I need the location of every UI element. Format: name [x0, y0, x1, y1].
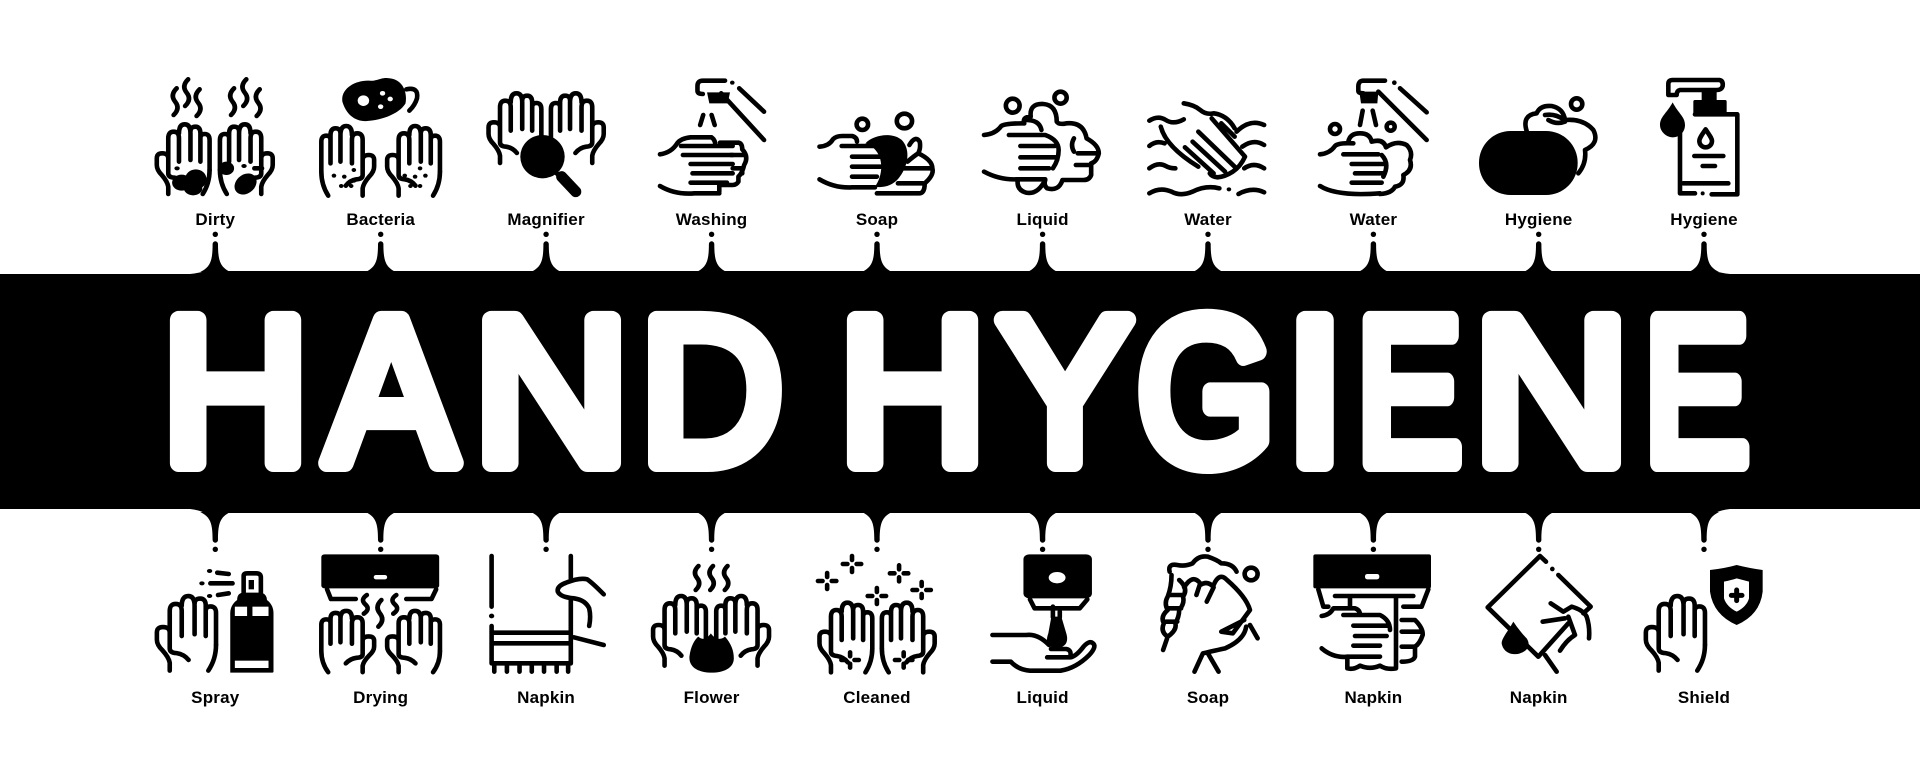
- item: Cleaned: [818, 512, 935, 707]
- connector: [1689, 512, 1719, 552]
- label: Shield: [1678, 688, 1730, 707]
- label: Water: [1350, 210, 1397, 229]
- label: Hygiene: [1505, 210, 1572, 229]
- title: HAND HYGIENE: N: [1474, 276, 1629, 508]
- icon: spray can and hand: [157, 569, 273, 673]
- title: HAND HYGIENE: N: [474, 276, 629, 508]
- item: Napkin dispenser: [1313, 512, 1431, 707]
- icon: magnifier over hands: [489, 93, 604, 192]
- title: HAND HYGIENE: H: [162, 276, 309, 508]
- label: Hygiene: [1670, 210, 1738, 229]
- item: Water: [1149, 103, 1264, 272]
- label: Napkin: [1510, 688, 1568, 707]
- icon: washing under tap: [660, 81, 764, 194]
- title: HAND HYGIENE: E: [1644, 276, 1749, 508]
- connector: [1358, 512, 1388, 552]
- icon: bacteria on hands: [321, 78, 440, 196]
- connector: [1193, 512, 1223, 552]
- black title band: [0, 271, 1920, 513]
- item: Spray: [157, 512, 273, 707]
- connector: [1524, 512, 1554, 552]
- title: HAND HYGIENE: D: [640, 276, 783, 508]
- icon: clean hands with sparkles: [818, 556, 935, 672]
- icon: wet wipe with drop: [1488, 556, 1591, 672]
- icon: pump bottle: [1660, 80, 1737, 195]
- icon: hand dryer: [321, 554, 440, 672]
- item: Napkin towel: [489, 512, 604, 707]
- icon: soap bar: [1479, 98, 1595, 195]
- item: Hygiene soap: [1479, 98, 1595, 272]
- connector: [1028, 232, 1058, 272]
- label: Flower: [684, 688, 740, 707]
- item: Liquid: [984, 92, 1099, 272]
- connector: [862, 512, 892, 552]
- label: Liquid: [1017, 210, 1069, 229]
- connector: [697, 232, 727, 272]
- icon: towel rail: [489, 556, 604, 672]
- title: HAND HYGIENE: E: [1356, 276, 1462, 508]
- title: HAND HYGIENE: Y: [998, 276, 1132, 508]
- icon: tap and foam: [1320, 80, 1427, 194]
- item: Napkin wipe: [1488, 512, 1591, 707]
- icon: flower in hands: [653, 566, 769, 673]
- connector: [200, 232, 230, 272]
- label: Bacteria: [346, 210, 415, 229]
- connector: [366, 232, 396, 272]
- label: Washing: [676, 210, 747, 229]
- connector: [531, 232, 561, 272]
- icon: wall dispenser: [992, 554, 1094, 671]
- label: Cleaned: [843, 688, 911, 707]
- item: Shield: [1646, 512, 1763, 707]
- item: Washing: [660, 81, 764, 272]
- connector: [1524, 232, 1554, 272]
- item: Drying: [321, 512, 440, 707]
- label: Magnifier: [507, 210, 585, 229]
- label: Dirty: [195, 210, 236, 229]
- title: HAND HYGIENE: H: [839, 276, 986, 508]
- icon: scrubbing hands: [1163, 556, 1258, 672]
- icon: paper towel dispenser: [1313, 554, 1431, 669]
- item: Liquid dispenser: [992, 512, 1094, 707]
- label: Drying: [353, 688, 408, 707]
- connector: [366, 512, 396, 552]
- icon: dirty hands: [157, 79, 273, 198]
- item: Soap hands: [1163, 512, 1258, 707]
- item: Water tap: [1320, 80, 1427, 272]
- icon: hands with foam: [984, 92, 1099, 193]
- connector: [697, 512, 727, 552]
- title: HAND HYGIENE: G: [1137, 276, 1275, 508]
- icon: shield and hand: [1646, 565, 1763, 671]
- connector: [200, 512, 230, 552]
- connector: [1358, 232, 1388, 272]
- item: Magnifier: [489, 93, 604, 272]
- connector: [531, 512, 561, 552]
- item: Bacteria: [321, 78, 440, 272]
- label: Liquid: [1017, 688, 1069, 707]
- label: Napkin: [1344, 688, 1402, 707]
- label: Spray: [191, 688, 240, 707]
- connector: [862, 232, 892, 272]
- connector: [1689, 232, 1719, 272]
- connector: [1028, 512, 1058, 552]
- connector: [1193, 232, 1223, 272]
- item: Soap: [819, 114, 933, 272]
- item: Dirty: [157, 79, 273, 272]
- title: HAND HYGIENE: I: [1286, 276, 1344, 508]
- label: Soap: [856, 210, 898, 229]
- title: HAND HYGIENE: A: [326, 276, 456, 508]
- label: Napkin: [517, 688, 575, 707]
- item: Hygiene dispenser: [1660, 80, 1738, 272]
- icon: hands in water: [1149, 103, 1264, 194]
- label: Soap: [1187, 688, 1229, 707]
- item: Flower: [653, 512, 769, 707]
- icon: soap in hands: [819, 114, 933, 193]
- label: Water: [1184, 210, 1232, 229]
